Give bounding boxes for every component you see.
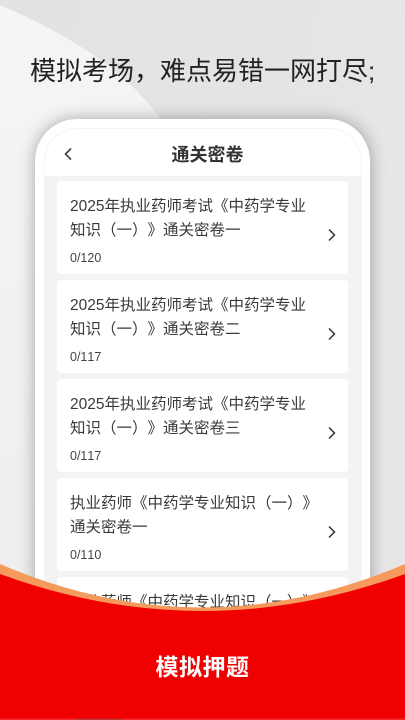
card 4 text: 通关密卷一	[70, 519, 148, 536]
card 3 count: 0/117	[70, 449, 101, 463]
banner label: 模拟押题	[156, 654, 250, 680]
app header title: 通关密卷	[172, 145, 244, 165]
panel: phone mockup	[35, 119, 370, 720]
card 2 text	[70, 296, 306, 338]
card 4	[57, 478, 348, 571]
card 1	[57, 181, 348, 274]
icon: chevron	[328, 427, 336, 439]
title: 模拟考场，难点易错一网打尽;	[30, 56, 375, 86]
panel: phone screen	[45, 129, 361, 720]
card 1 text	[70, 198, 306, 239]
card 2 count: 0/117	[70, 350, 101, 364]
card 4 text: 执业药师《中药学专业知识（一）》	[70, 495, 318, 512]
card 3	[57, 379, 348, 472]
card 1 text: 2025年执业药师考试《中药学专业	[70, 198, 306, 215]
card 5	[57, 577, 348, 670]
card 4 text	[70, 494, 318, 536]
card 1 count: 0/120	[70, 251, 101, 265]
card 2 text: 知识（一）》通关密卷二	[70, 321, 241, 338]
card 1 text: 知识（一）》通关密卷一	[70, 222, 241, 239]
card 2	[57, 280, 348, 373]
app header	[45, 129, 361, 176]
card 3 text	[70, 396, 306, 437]
red banner with curved edge	[0, 564, 405, 720]
card 4 count: 0/110	[70, 548, 101, 562]
card 5 text: 通关密卷二	[70, 618, 148, 635]
icon: chevron	[328, 229, 336, 241]
icon: chevron	[328, 526, 336, 538]
card 3 text: 2025年执业药师考试《中药学专业	[70, 396, 306, 413]
icon: back arrow	[64, 148, 72, 160]
icon: chevron	[328, 328, 336, 340]
card 5 text: 执业药师《中药学专业知识（一）》	[70, 594, 318, 611]
card 3 text: 知识（一）》通关密卷三	[70, 420, 241, 437]
card 5 text	[70, 594, 318, 635]
card 2 text: 2025年执业药师考试《中药学专业	[70, 297, 306, 314]
